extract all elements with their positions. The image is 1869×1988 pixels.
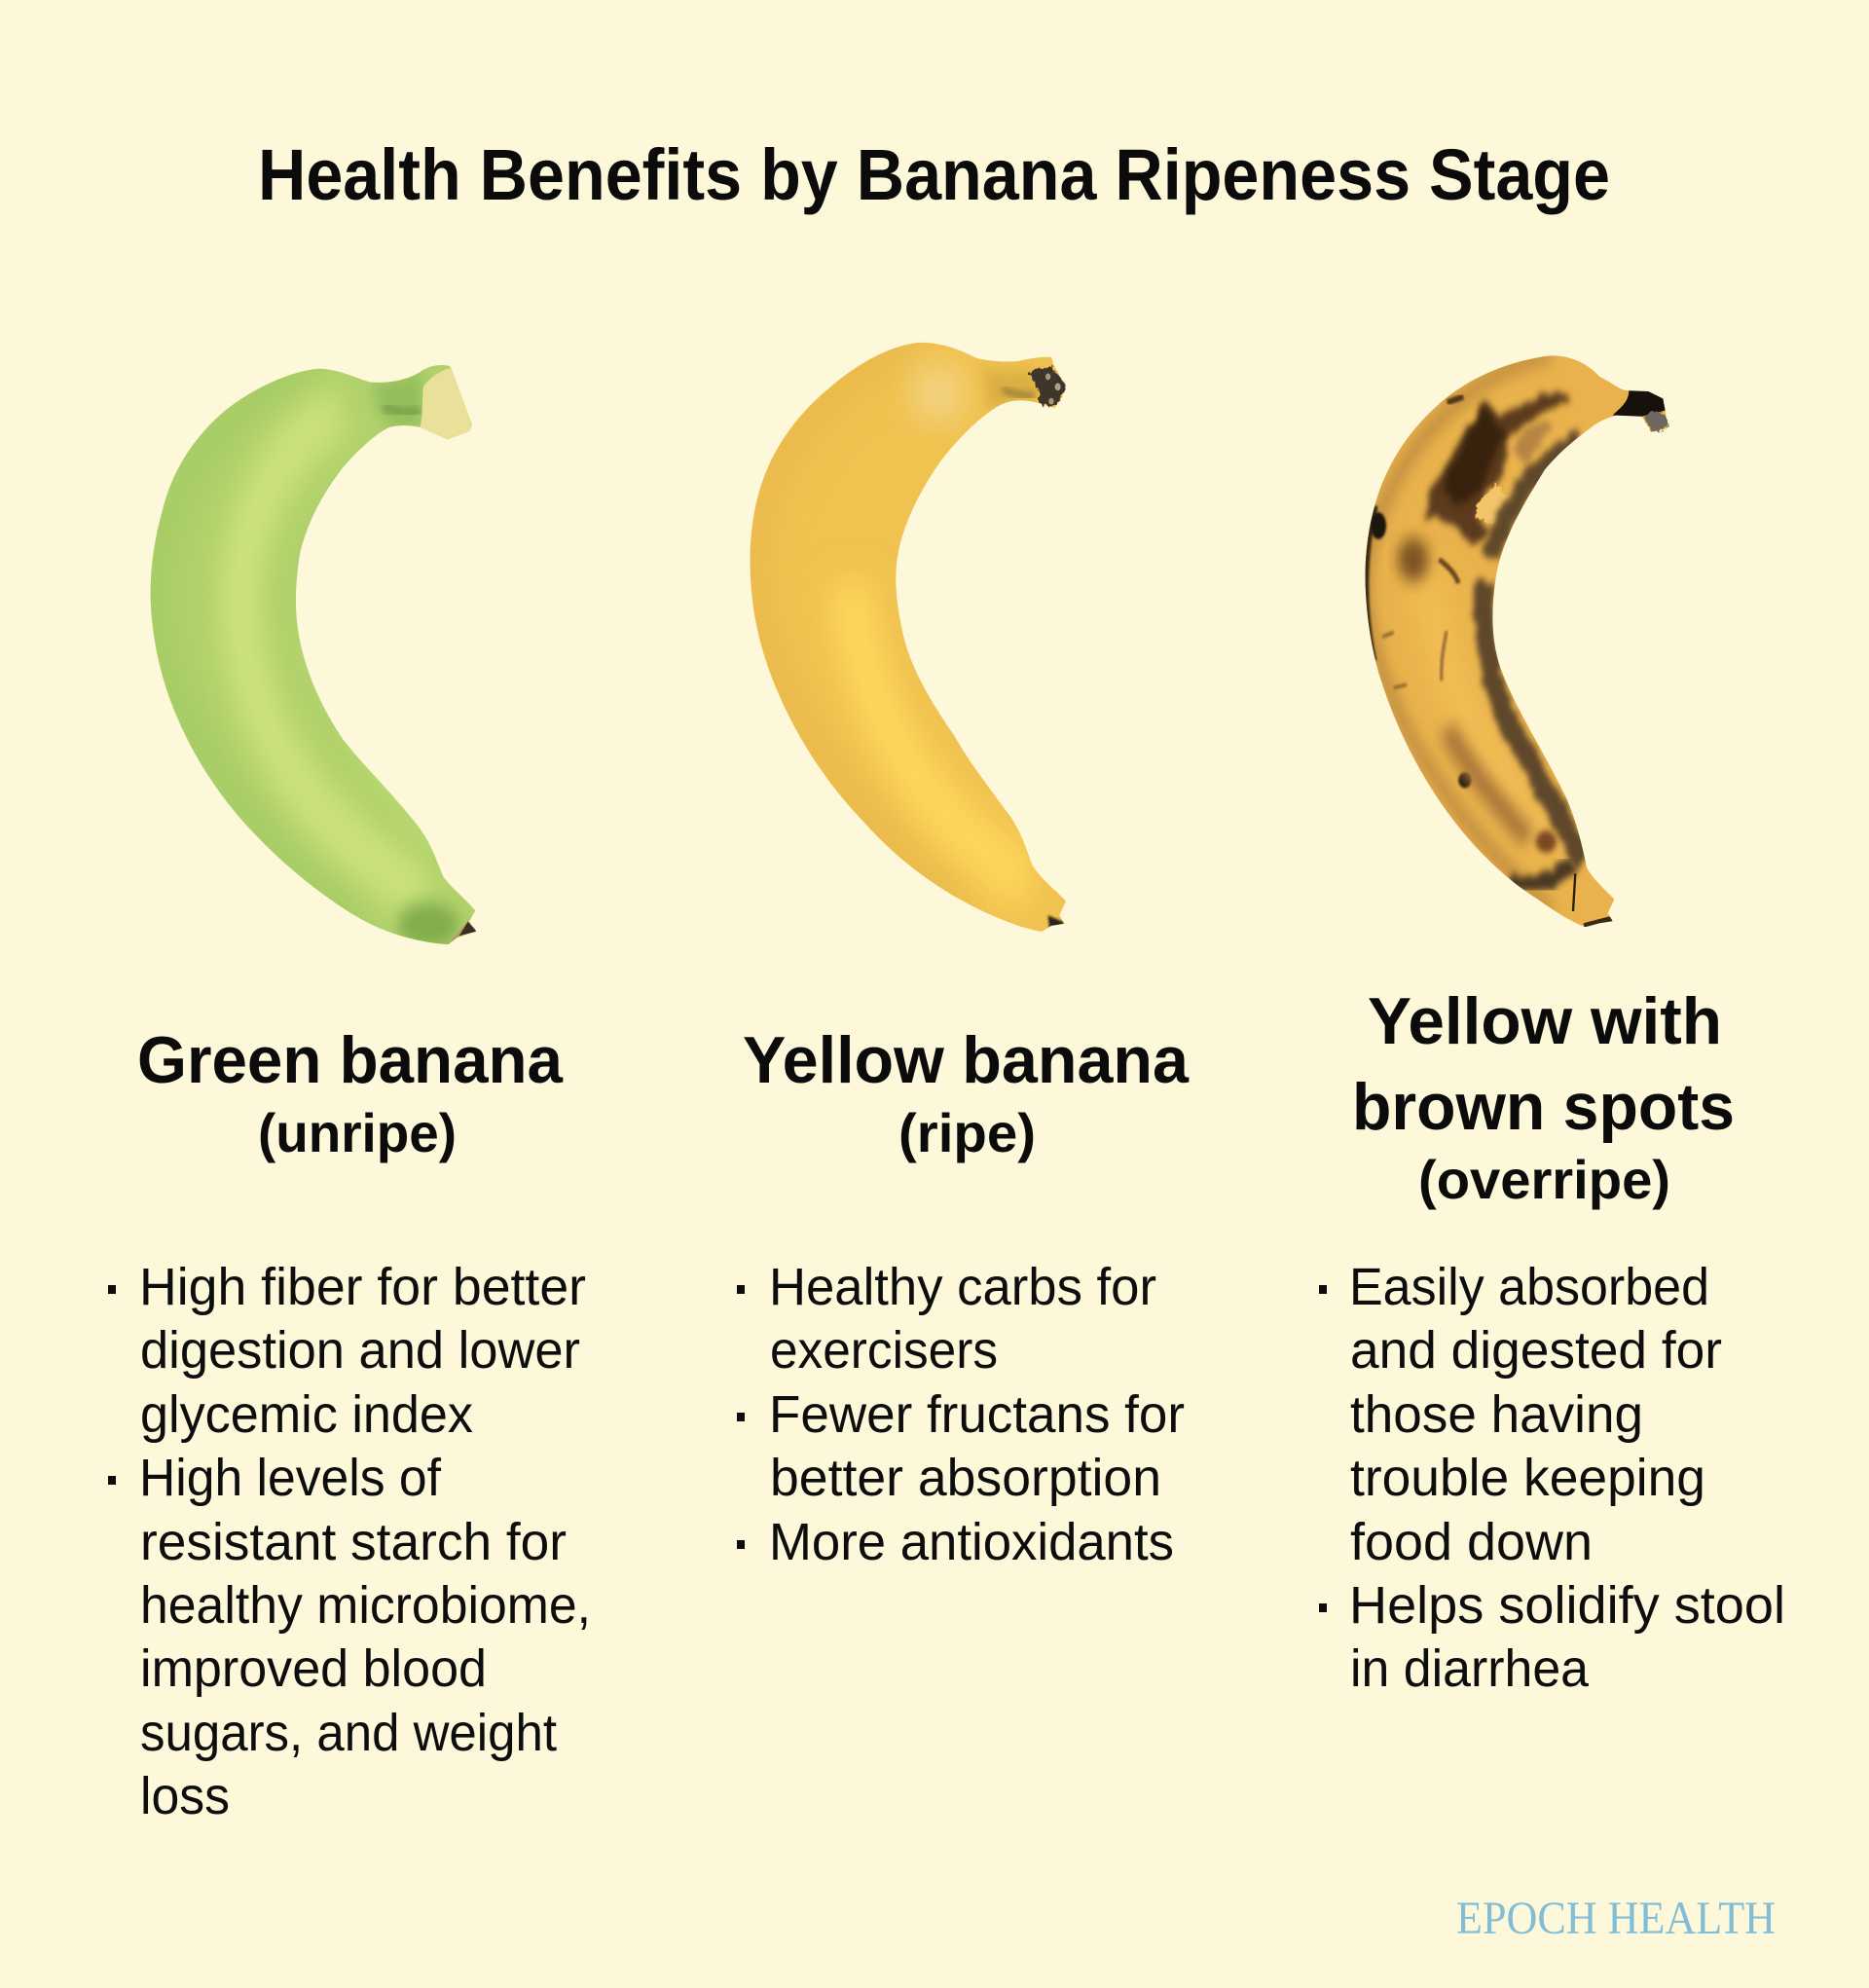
benefits list: yellow banana: exercisers	[770, 1321, 998, 1380]
heading: green banana	[137, 1023, 564, 1163]
benefits list: yellow banana: better absorption	[770, 1449, 1161, 1507]
banana stem cut	[421, 368, 472, 440]
icon: yellow banana	[750, 343, 1066, 932]
benefits list: green banana: healthy microbiome,	[140, 1576, 591, 1635]
logo: Epoch Health: EPOCH HEALTH	[1456, 1893, 1776, 1944]
benefits list: green banana: High fiber for better	[139, 1258, 586, 1316]
banana stem end	[1029, 366, 1066, 408]
panel: green banana (unripe)	[108, 331, 591, 1825]
panel: yellow banana (ripe)	[720, 321, 1190, 1571]
benefits list: green banana: High levels of	[139, 1449, 442, 1507]
benefits list: yellow banana	[737, 1258, 1185, 1571]
benefits list: overripe banana: and digested for	[1350, 1321, 1722, 1380]
benefits list: yellow banana: Healthy carbs for	[769, 1258, 1156, 1316]
benefits list: overripe banana: Easily absorbed	[1349, 1258, 1709, 1316]
icon: overripe banana	[1365, 355, 1669, 927]
benefits list: overripe banana: those having	[1350, 1385, 1643, 1444]
heading: yellow with brown spots: (overripe)	[1418, 1149, 1670, 1210]
benefits list: green banana: digestion and lower	[140, 1321, 580, 1380]
benefits list: overripe banana: food down	[1350, 1513, 1593, 1571]
heading: yellow with brown spots: brown spots	[1352, 1070, 1735, 1144]
benefits list: green banana: improved blood	[140, 1639, 487, 1698]
heading: yellow with brown spots: Yellow with	[1368, 984, 1722, 1058]
heading: yellow with brown spots	[1352, 984, 1735, 1210]
heading: green banana: Green banana	[137, 1023, 564, 1097]
title: Health Benefits by Banana Ripeness Stage	[258, 134, 1610, 215]
heading: yellow banana	[743, 1023, 1190, 1163]
benefits list: overripe banana: in diarrhea	[1350, 1639, 1590, 1698]
heading: green banana: (unripe)	[258, 1102, 457, 1163]
brown bruise	[1426, 390, 1569, 545]
benefits list: overripe banana: trouble keeping	[1350, 1449, 1705, 1507]
heading: yellow banana: Yellow banana	[743, 1023, 1190, 1097]
benefits list: overripe banana	[1319, 1258, 1785, 1698]
benefits list: green banana	[108, 1258, 591, 1825]
benefits list: green banana: glycemic index	[140, 1385, 473, 1444]
benefits list: yellow banana: More antioxidants	[769, 1513, 1174, 1571]
heading: yellow banana: (ripe)	[898, 1102, 1036, 1163]
banana stem end	[1613, 390, 1667, 432]
icon: green banana	[150, 365, 477, 944]
benefits list: green banana: loss	[140, 1767, 230, 1825]
benefits list: overripe banana: Helps solidify stool	[1349, 1576, 1785, 1635]
benefits list: green banana: resistant starch for	[140, 1513, 567, 1571]
benefits list: green banana: sugars, and weight	[140, 1704, 557, 1762]
panel: yellow with brown spots (overripe)	[1319, 331, 1785, 1698]
benefits list: yellow banana: Fewer fructans for	[769, 1385, 1185, 1444]
